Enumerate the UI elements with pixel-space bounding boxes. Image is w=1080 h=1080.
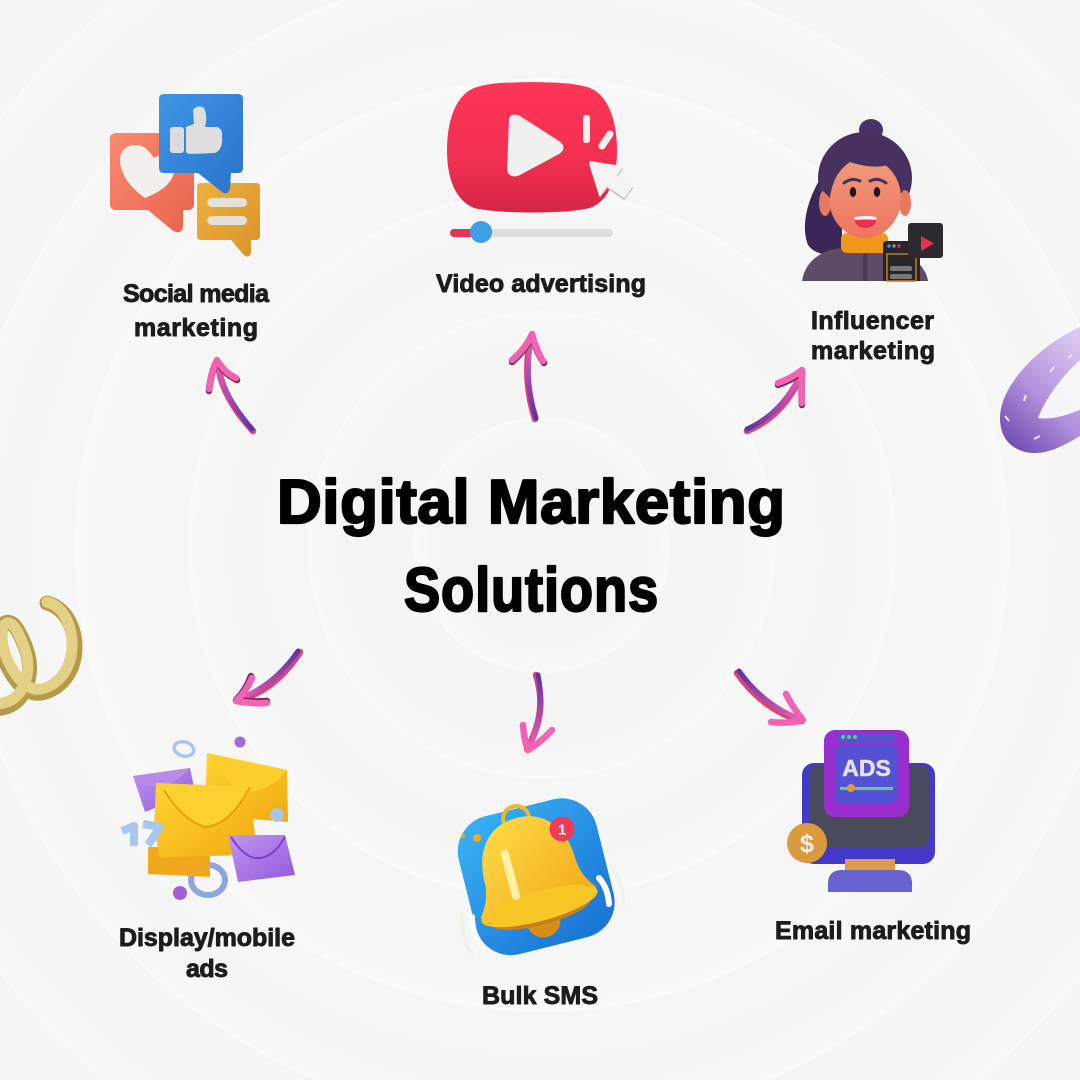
arrow: to display ads	[236, 651, 300, 703]
label: social media marketing: Social media	[123, 280, 270, 308]
icon: ads monitor	[787, 730, 935, 892]
label: display/mobile ads: Display/mobile	[119, 924, 295, 952]
title: Digital Marketing	[277, 468, 785, 537]
orange lower envelope	[148, 847, 210, 877]
vibration marks	[462, 867, 624, 955]
label: display/mobile ads: ads	[186, 955, 228, 983]
yellow back envelope	[205, 753, 288, 822]
icon: social media bubbles	[110, 94, 260, 257]
purple back envelope	[133, 768, 195, 812]
arrow: to bulk sms	[523, 675, 552, 750]
dollar coin	[787, 823, 827, 863]
label: email marketing: Email marketing	[775, 917, 971, 945]
decorative purple torus	[1000, 327, 1080, 453]
arrow: to influencer	[747, 370, 802, 431]
slider bar	[450, 221, 613, 243]
icon: notification bell	[450, 791, 624, 963]
play tile	[908, 223, 943, 258]
label: display/mobile ads	[119, 924, 295, 983]
label: influencer marketing: Influencer	[811, 307, 934, 335]
label: influencer marketing	[811, 307, 935, 365]
title: Solutions	[404, 556, 659, 625]
arrow: to social media	[209, 360, 253, 431]
dollar coin: $	[800, 830, 814, 858]
blue chevrons	[122, 824, 160, 846]
tablet	[824, 730, 909, 817]
arrow: to email marketing	[737, 671, 803, 723]
phone	[883, 241, 920, 281]
purple front envelope	[228, 835, 295, 882]
title	[277, 468, 785, 625]
icon: video play button	[447, 82, 632, 243]
icon: thumbs-up bubble	[159, 94, 243, 193]
tablet: ADS	[842, 755, 891, 781]
notification badge: 1	[558, 822, 566, 838]
decorative gold spiral	[0, 602, 75, 709]
icon: heart bubble	[110, 133, 194, 232]
label: social media marketing: marketing	[134, 314, 258, 342]
yellow main envelope	[154, 783, 257, 857]
label: influencer marketing: marketing	[811, 337, 935, 365]
cursor	[590, 162, 632, 199]
notification badge	[550, 816, 574, 842]
label: bulk sms: Bulk SMS	[482, 982, 598, 1010]
icon: influencer character	[802, 119, 943, 281]
icon: comment bubble	[197, 183, 260, 257]
label: video advertising: Video advertising	[436, 270, 646, 298]
icon: envelopes	[122, 736, 295, 900]
arrow: to video advertising	[512, 334, 544, 419]
label: social media marketing	[123, 280, 270, 342]
